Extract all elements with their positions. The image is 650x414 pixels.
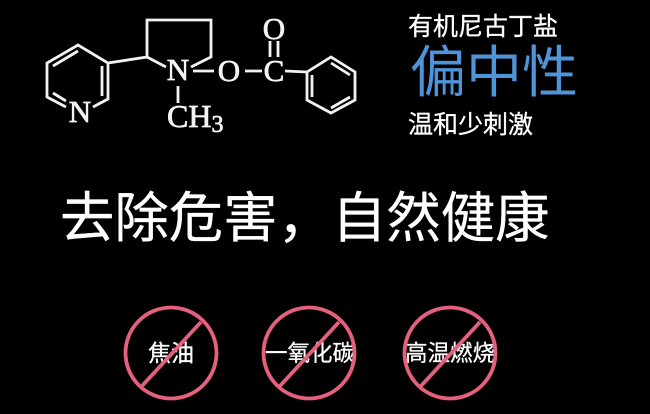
methyl label: 3 bbox=[211, 112, 223, 138]
prohibited item: tar: 焦油 bbox=[148, 340, 194, 366]
main heading: 去除危害，自然健康 bbox=[60, 188, 550, 249]
prohibited item: carbon monoxide bbox=[262, 306, 356, 400]
pyrrolidine ring: N bbox=[167, 52, 189, 87]
heading: near neutral: 偏中性 bbox=[410, 41, 578, 104]
text: mild and low irritation: 温和少刺激 bbox=[408, 111, 533, 139]
methyl label: CH bbox=[167, 98, 211, 134]
prohibited item: high temperature combustion bbox=[402, 306, 498, 400]
ester group: O bbox=[263, 11, 285, 46]
pyridine ring: N bbox=[69, 94, 91, 129]
text: organic nicotine salt: 有机尼古丁盐 bbox=[408, 13, 558, 41]
prohibited item: high temperature combustion: 高温燃烧 bbox=[405, 341, 495, 366]
pyrrolidine ring bbox=[108, 20, 211, 87]
pyridine ring bbox=[47, 45, 108, 129]
ester group bbox=[178, 11, 307, 103]
benzene ring bbox=[307, 57, 355, 113]
prohibited item: carbon monoxide: 一氧化碳 bbox=[265, 341, 355, 366]
prohibited item: tar bbox=[124, 306, 218, 400]
ester group: O bbox=[218, 53, 240, 88]
ester group: C bbox=[264, 53, 284, 88]
